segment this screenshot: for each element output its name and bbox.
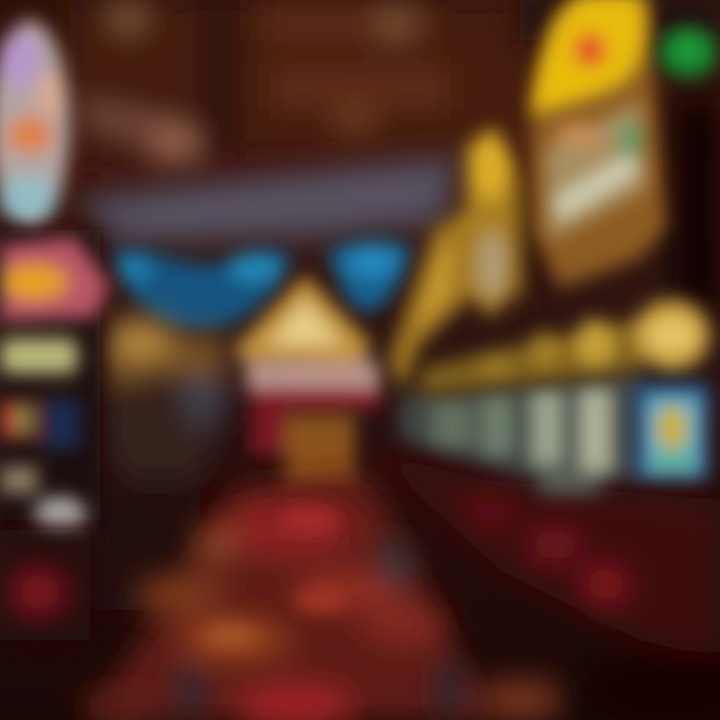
left slot machine tower [0,20,110,640]
banner: grey-blue band [78,155,460,245]
icon: green light [658,26,718,78]
machine lit bands [0,236,110,533]
right row of slot machines [400,372,640,494]
left mid aisle [90,318,225,610]
carpet base [90,475,490,720]
machine body [0,230,100,520]
central yellow booth [232,275,380,495]
blue canopy shapes [112,240,412,332]
right dark wall [520,0,720,310]
ceiling [70,0,540,174]
yellow sign: large sign [530,0,666,288]
right row of seats [370,450,720,720]
blue slot machine panel [636,384,708,480]
carpet [80,475,565,720]
right row of golden lights [420,299,710,395]
machine top sign [0,20,70,230]
machine base [0,530,90,640]
yellow sign: small signs [388,125,534,392]
